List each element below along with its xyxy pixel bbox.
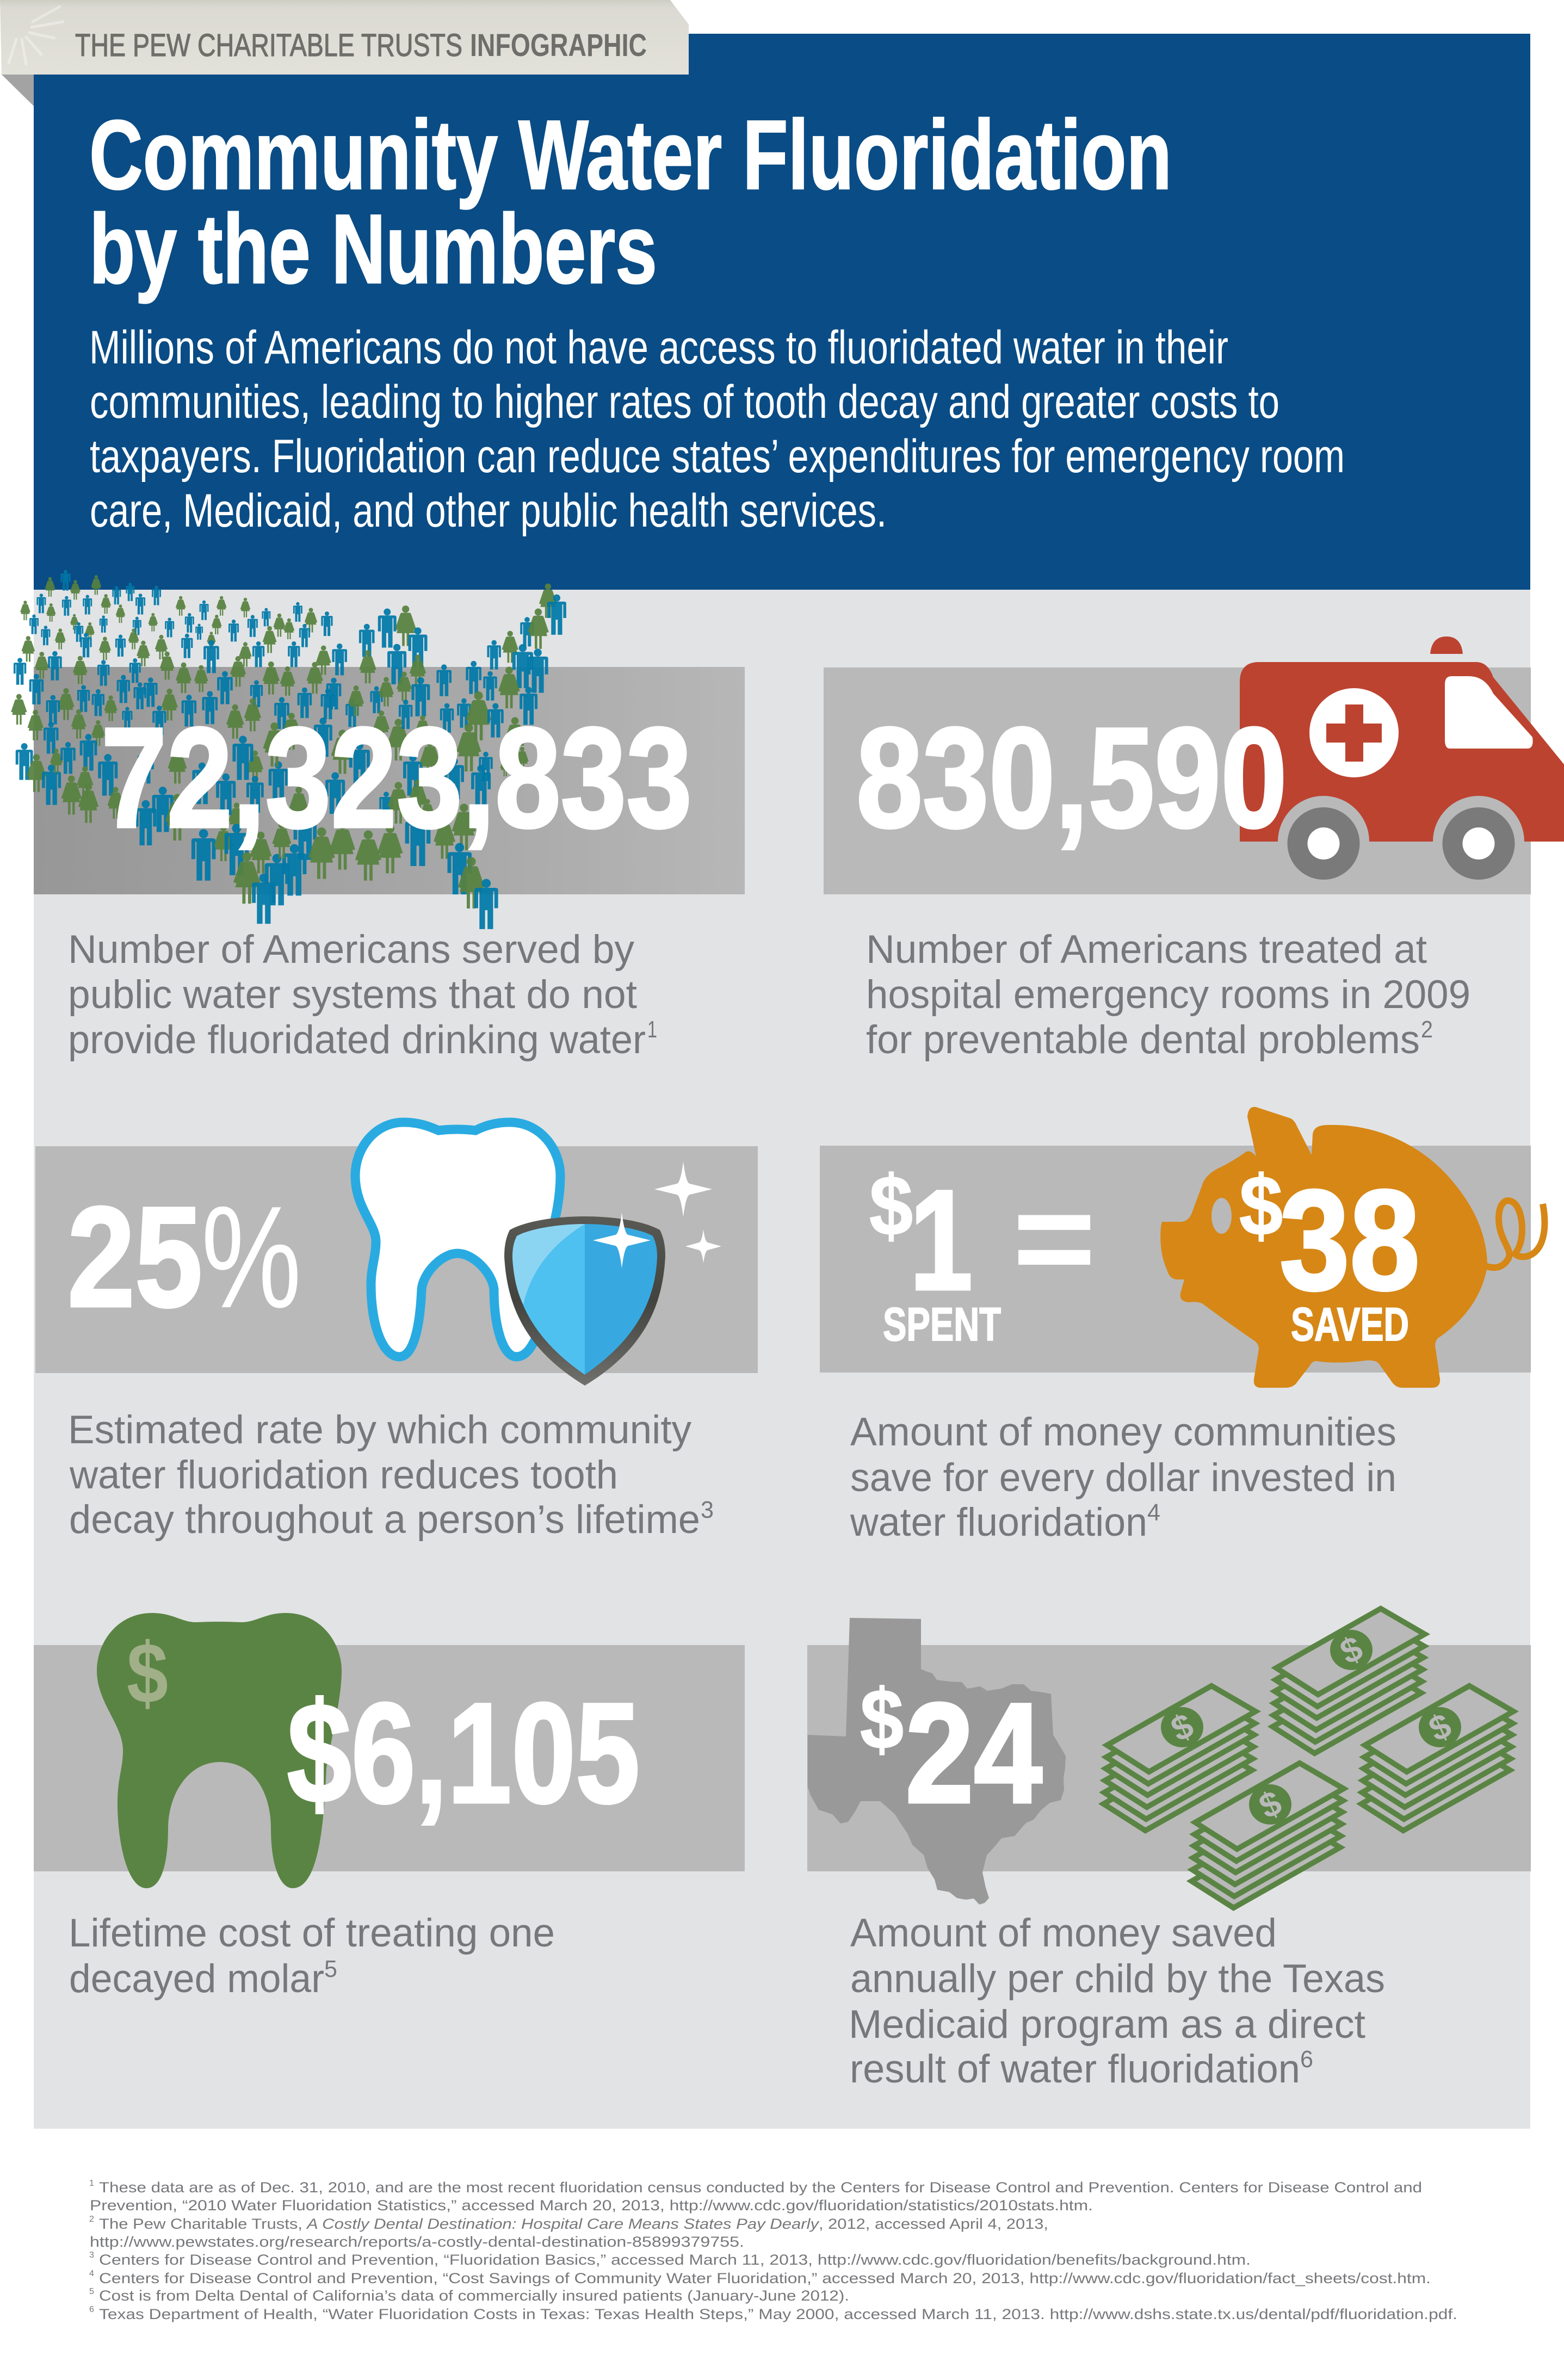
caption: annually per child by the Texas — [850, 1956, 1385, 2001]
stat bar — [807, 1645, 1531, 1871]
intro paragraph: communities, leading to higher rates of tooth decay and greater costs to — [90, 376, 1279, 428]
panel: $1 spent equals $38 saved — [820, 1107, 1544, 1544]
text: $38 saved: 38 — [1279, 1160, 1420, 1320]
number — [67, 1176, 301, 1338]
equals sign: = — [1013, 1166, 1096, 1310]
caption — [69, 1910, 555, 2001]
caption: 4 — [1147, 1499, 1160, 1526]
footnotes: 3 — [89, 2251, 94, 2260]
intro paragraph: care, Medicaid, and other public health services. — [90, 485, 887, 537]
icon: green molar with dollar sign — [97, 1613, 342, 1888]
icon: piggy bank — [1160, 1107, 1544, 1388]
caption — [849, 1910, 1385, 2091]
icon: stacks of money — [1103, 1609, 1513, 1908]
caption: Estimated rate by which community — [68, 1407, 691, 1452]
caption: provide fluoridated drinking water — [68, 1017, 646, 1062]
caption: 6 — [1300, 2046, 1313, 2073]
number: 25 — [67, 1177, 202, 1337]
number: 830,590 — [856, 698, 1287, 857]
icon: green molar with dollar sign: $ — [127, 1625, 168, 1721]
caption: for preventable dental problems — [866, 1017, 1420, 1062]
footnotes: Centers for Disease Control and Prevention, “Fluoridation Basics,” accessed March 11, 2013, http://www.cdc.gov/fluoridation/benefits/background.htm. — [99, 2252, 1251, 2268]
number: $6,105 — [287, 1673, 640, 1833]
icon: stacks of money: $ — [1165, 1705, 1199, 1749]
stat bar — [824, 667, 1531, 894]
panel: 25% tooth decay reduction — [35, 1122, 758, 1542]
caption: decayed molar — [69, 1956, 324, 2001]
icon: stacks of money: $ — [1253, 1783, 1287, 1826]
caption: Amount of money saved — [850, 1910, 1277, 1955]
caption — [68, 926, 657, 1062]
text: $38 saved: $ — [1239, 1159, 1283, 1253]
icon: tooth with shield and sparkles — [355, 1122, 721, 1386]
footnotes: 1 — [89, 2179, 94, 2188]
title — [89, 100, 1172, 304]
caption: water fluoridation reduces tooth — [69, 1452, 618, 1497]
text: $1 spent: SPENT — [883, 1299, 1001, 1351]
caption: 3 — [701, 1497, 714, 1523]
panel: $6,105 lifetime cost — [34, 1613, 745, 2001]
caption: save for every dollar invested in — [850, 1455, 1396, 1500]
text: $1 spent — [869, 1159, 1001, 1351]
title: by the Numbers — [89, 194, 657, 304]
footnotes: These data are as of Dec. 31, 2010, and are the most recent fluoridation census conducted by the Centers for Disease Control and Prevention. Centers for Disease Control and — [99, 2179, 1422, 2196]
caption — [850, 1409, 1396, 1544]
icon: people forming map of the United States — [11, 570, 566, 929]
caption: Number of Americans served by — [68, 926, 634, 972]
number: $ — [860, 1672, 904, 1767]
footnotes: , 2012, accessed April 4, 2013, — [819, 2216, 1048, 2232]
caption: result of water fluoridation — [850, 2046, 1300, 2091]
footnotes: 4 — [89, 2269, 94, 2278]
caption — [866, 926, 1470, 1062]
tag: The Pew Charitable Trusts Infographic — [0, 0, 689, 106]
tag: The Pew Charitable Trusts Infographic: INFOGRAPHIC — [470, 28, 647, 63]
panel: $24 saved in Texas — [807, 1609, 1531, 2091]
intro paragraph: Millions of Americans do not have access to fluoridated water in their — [89, 322, 1228, 374]
stat bar — [34, 667, 745, 894]
stat bar — [35, 1146, 758, 1373]
title: Community Water Fluoridation — [89, 100, 1172, 210]
icon: stacks of money: $ — [1423, 1705, 1457, 1749]
caption: Lifetime cost of treating one — [69, 1910, 555, 1955]
footnotes: 5 — [89, 2287, 94, 2296]
text: $1 spent: 1 — [910, 1160, 973, 1320]
footnotes: Centers for Disease Control and Prevention, “Cost Savings of Community Water Fluoridation,” accessed March 20, 2013, http://www.cdc.gov/fluoridation/fact_sheets/cost.htm. — [99, 2270, 1431, 2286]
caption: 1 — [647, 1016, 657, 1043]
caption: hospital emergency rooms in 2009 — [866, 972, 1470, 1017]
footnotes — [89, 2179, 1457, 2322]
footnotes: Cost is from Delta Dental of California’s data of commercially insured patients (January-June 2012). — [99, 2288, 849, 2304]
caption: water fluoridation — [850, 1499, 1147, 1544]
footnotes: http://www.pewstates.org/research/reports/a-costly-dental-destination-85899379755. — [90, 2234, 744, 2250]
icon: ambulance — [1240, 636, 1564, 880]
caption: decay throughout a person’s lifetime — [69, 1497, 700, 1542]
footnotes: A Costly Dental Destination: Hospital Care Means States Pay Dearly — [306, 2216, 820, 2232]
number — [860, 1672, 1043, 1833]
footnotes: The Pew Charitable Trusts, — [99, 2216, 302, 2232]
panel: 830,590 emergency room visits — [824, 636, 1564, 1062]
panel: 72,323,833 Americans — [11, 570, 745, 1062]
stat bar — [34, 1645, 745, 1871]
caption: Medicaid program as a direct — [849, 2001, 1365, 2047]
number: % — [201, 1176, 301, 1338]
footnotes: 6 — [89, 2305, 94, 2314]
text: $1 spent: $ — [869, 1159, 913, 1253]
icon: stacks of money: $ — [1334, 1628, 1368, 1672]
number: 24 — [905, 1673, 1043, 1833]
caption: 5 — [324, 1956, 337, 1982]
caption: Amount of money communities — [850, 1409, 1396, 1454]
tag: The Pew Charitable Trusts Infographic: THE PEW CHARITABLE TRUSTS — [75, 28, 462, 63]
light grey content panel — [34, 590, 1530, 2129]
text: $38 saved — [1239, 1159, 1420, 1351]
footnotes: 2 — [89, 2215, 94, 2224]
text: $38 saved: SAVED — [1291, 1299, 1409, 1351]
caption: public water systems that do not — [68, 972, 637, 1017]
icon: map of Texas — [807, 1618, 1066, 1905]
caption: 2 — [1421, 1016, 1433, 1043]
number: 72,323,833 — [101, 698, 692, 857]
footnotes: Prevention, “2010 Water Fluoridation Statistics,” accessed March 20, 2013, http://www.cdc.gov/fluoridation/statistics/2010stats.htm. — [90, 2197, 1093, 2214]
caption: Number of Americans treated at — [866, 926, 1427, 972]
stat bar — [820, 1146, 1531, 1373]
caption — [68, 1407, 714, 1542]
footnotes: Texas Department of Health, “Water Fluoridation Costs in Texas: Texas Health Steps,” May 2000, accessed March 11, 2013. http://www.dshs.state.tx.us/dental/pdf/fluoridation.pdf. — [99, 2306, 1457, 2322]
intro paragraph — [89, 322, 1345, 537]
header panel — [34, 34, 1530, 590]
